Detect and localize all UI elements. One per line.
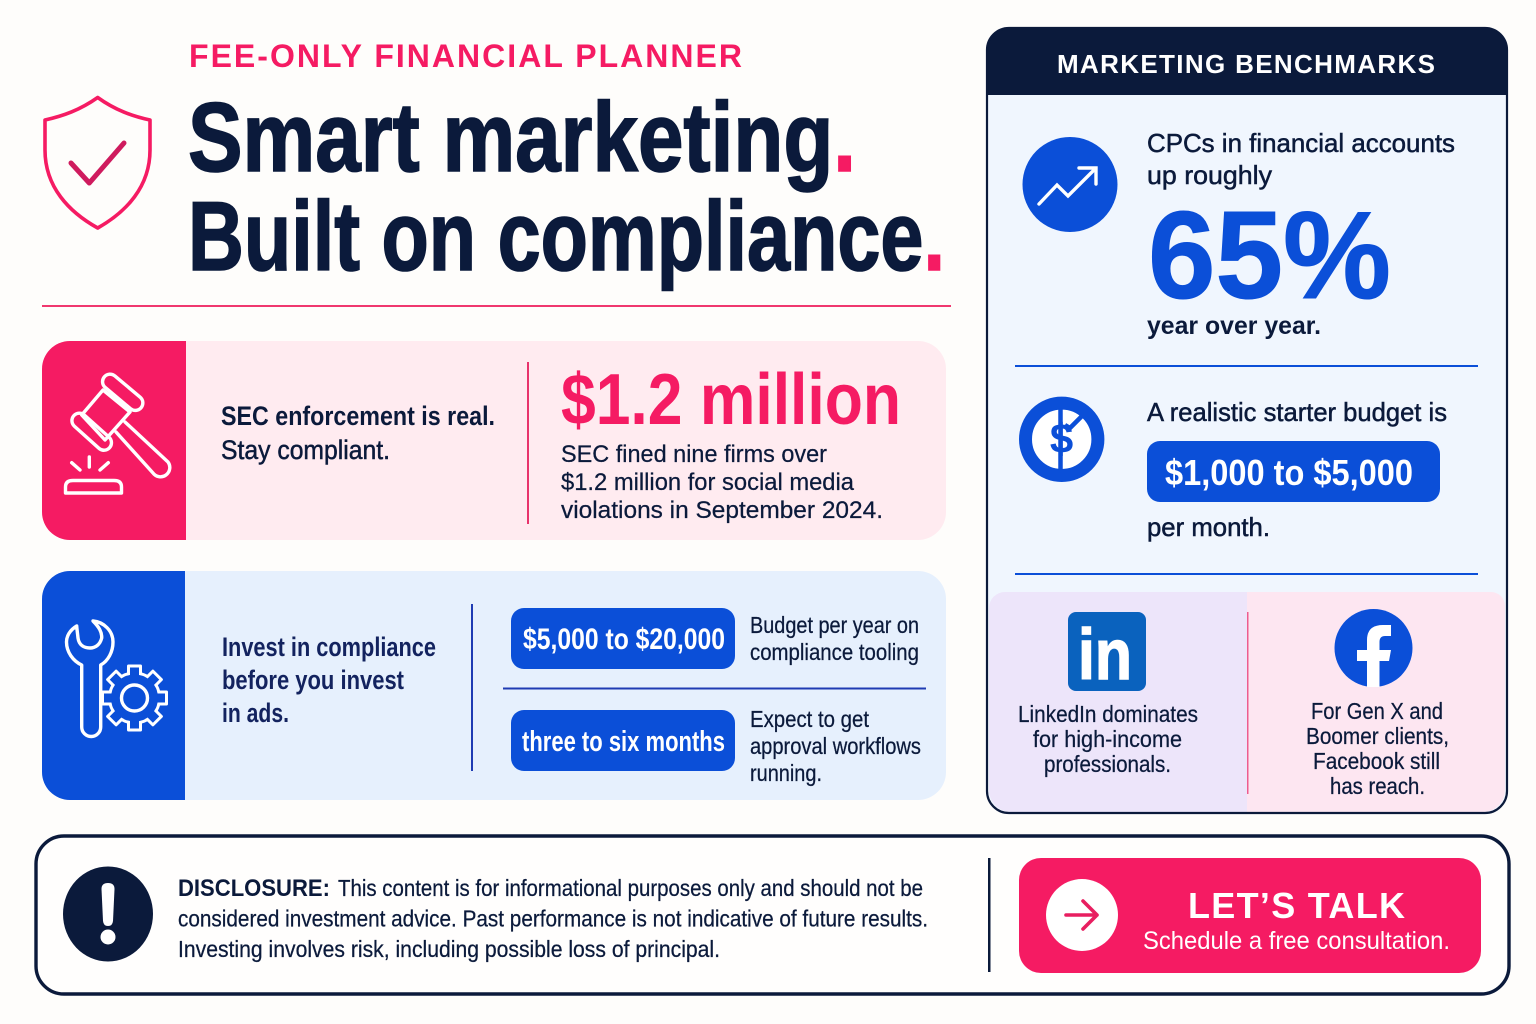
- icon: gavel: [66, 371, 170, 493]
- icon: wrench and gear: [66, 621, 166, 736]
- text: expect approval workflows: [750, 706, 921, 786]
- text: disclosure: considered investment advice. Past performance is not indicative of future results.: [178, 906, 928, 932]
- text: disclosure: Investing involves risk, including possible loss of principal.: [178, 936, 720, 962]
- panel: linkedin: [989, 592, 1247, 812]
- text: disclosure: DISCLOSURE:: [178, 875, 330, 902]
- text: linkedin dominates: [1018, 701, 1198, 777]
- title: Built on compliance.: [188, 181, 945, 291]
- text: SEC fine detail: violations in September 2024.: [561, 497, 883, 524]
- text: SEC enforcement is real: Stay compliant.: [221, 435, 390, 465]
- text: invest in compliance: Invest in compliance: [222, 632, 436, 662]
- text: disclosure: [178, 875, 928, 962]
- icon: linkedin: in: [1078, 616, 1132, 695]
- pill: three to six months: [511, 710, 735, 771]
- text: SEC fine detail: [561, 441, 883, 524]
- text: gen x and boomer: has reach.: [1330, 773, 1425, 799]
- text: expect approval workflows: running.: [750, 760, 822, 786]
- text: budget per year: [750, 612, 919, 665]
- text: SEC fine detail: $1.2 million for social media: [561, 469, 855, 496]
- text: invest in compliance: [222, 632, 436, 728]
- text: gen x and boomer: [1306, 698, 1449, 799]
- text: SEC enforcement is real: SEC enforcement is real.: [221, 401, 495, 431]
- text: disclosure: This content is for informational purposes only and should not be: [338, 875, 923, 901]
- panel: invest in compliance: [42, 571, 946, 800]
- text: gen x and boomer: Boomer clients,: [1306, 723, 1449, 749]
- icon: exclamation: [63, 866, 153, 962]
- text: expect approval workflows: Expect to get: [750, 706, 869, 732]
- icon: facebook: [1334, 609, 1412, 687]
- panel: SEC enforcement: [42, 341, 946, 540]
- icon: dollar: [1026, 403, 1098, 475]
- text: gen x and boomer: Facebook still: [1313, 748, 1440, 774]
- panel: disclosure and call to action: [36, 836, 1509, 994]
- text: realistic starter budget: A realistic starter budget is: [1147, 397, 1447, 427]
- header: marketing benchmarks: [987, 28, 1507, 95]
- text: year over year: year over year.: [1147, 312, 1321, 340]
- text: invest in compliance: before you invest: [222, 665, 404, 695]
- text: gen x and boomer: For Gen X and: [1311, 698, 1443, 724]
- text: linkedin dominates: for high-income: [1033, 726, 1182, 752]
- pill: $5,000 to $20,000: $5,000 to $20,000: [523, 623, 725, 656]
- title: Smart marketing.: [188, 82, 856, 192]
- pill: three to six months: three to six months: [522, 726, 725, 758]
- text: SEC fine detail: SEC fined nine firms over: [561, 441, 827, 468]
- button: let's talk: LET’S TALK: [1188, 885, 1405, 926]
- icon: trending up: [1022, 137, 1118, 232]
- stat: 65%: 65%: [1148, 187, 1391, 325]
- pill: $1,000 to $5,000: $1,000 to $5,000: [1165, 452, 1413, 493]
- panel: facebook: [1247, 592, 1505, 812]
- text: linkedin dominates: LinkedIn dominates: [1018, 701, 1198, 727]
- pill: $1,000 to $5,000: [1147, 441, 1440, 502]
- pill: $5,000 to $20,000: [511, 608, 735, 669]
- text: expect approval workflows: approval workflows: [750, 733, 921, 759]
- text: CPCs up roughly: [1147, 128, 1455, 190]
- icon: shield with check: [45, 98, 150, 228]
- icon: dollar: $: [1050, 415, 1073, 462]
- text: SEC enforcement is real: [221, 401, 495, 465]
- text: budget per year: compliance tooling: [750, 639, 919, 665]
- button: let's talk: [1019, 858, 1481, 973]
- text: invest in compliance: in ads.: [222, 698, 289, 728]
- header: marketing benchmarks: MARKETING BENCHMARKS: [1057, 49, 1435, 79]
- text: per month: per month.: [1147, 512, 1270, 542]
- text: linkedin dominates: professionals.: [1044, 751, 1171, 777]
- eyebrow: fee-only financial planner: FEE-ONLY FINANCIAL PLANNER: [189, 38, 742, 74]
- stat: $1.2 million: $1.2 million: [561, 360, 901, 440]
- text: CPCs up roughly: up roughly: [1147, 160, 1272, 190]
- text: CPCs up roughly: CPCs in financial accounts: [1147, 128, 1455, 158]
- panel: marketing benchmarks: [987, 28, 1507, 813]
- title: [188, 82, 945, 291]
- icon: arrow circle: [1046, 879, 1118, 951]
- text: budget per year: Budget per year on: [750, 612, 919, 638]
- button: let's talk: Schedule a free consultation.: [1143, 927, 1450, 955]
